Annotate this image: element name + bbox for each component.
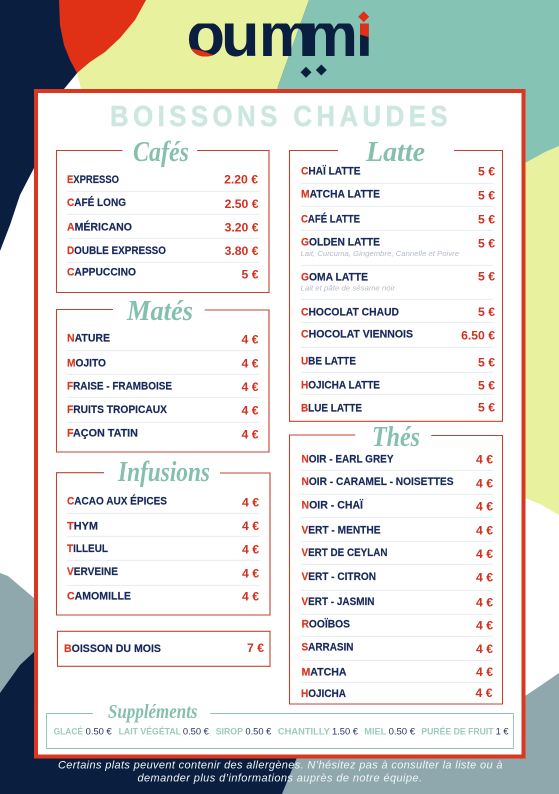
panel: matés: 4 € [242,404,259,418]
panel: thés: 4 € [476,453,493,467]
panel: latte: GOMA LATTE [301,271,368,283]
panel: infusions: THYM [67,520,98,532]
panel: latte: HOJICHA LATTE [301,380,380,392]
panel: thés: 4 € [476,523,493,537]
panel: thés: 4 € [476,499,493,513]
panel: cafés: DOUBLE EXPRESSO [67,245,166,257]
panel: thés: ROOÏBOS [302,618,350,631]
logo: oummi [186,0,373,70]
panel: thés: 4 € [476,642,493,656]
panel: cafés: 3.20 € [225,220,259,234]
panel: matés: 4 € [242,380,259,394]
panel: thés: VERT - CITRON [302,571,376,583]
main menu panel [36,91,524,756]
panel: latte: 5 € [478,378,495,392]
panel: thés: 4 € [476,547,493,561]
panel: latte: UBE LATTE [301,356,356,368]
panel: cafés: CAFÉ LONG [67,196,126,209]
panel: matés: FRUITS TROPICAUX [67,404,167,416]
panel: latte: BLUE LATTE [301,402,362,414]
panel: thés: 4 € [476,476,493,490]
panel: latte: 5 € [478,164,495,178]
panel: thés: 4 € [476,595,493,609]
panel: cafés: 2.50 € [225,197,259,211]
panel: latte: 5 € [478,400,495,414]
panel: suppléments: CHANTILLY [278,727,330,737]
panel: suppléments: GLACÉ [54,727,83,737]
panel: infusions: 4 € [242,543,259,557]
panel: suppléments: PURÉE DE FRUIT [421,727,494,737]
panel: suppléments: SIROP [216,727,243,737]
title: BOISSONS CHAUDES [110,101,452,133]
panel: thés: VERT - MENTHE [302,524,381,536]
panel: infusions: Infusions [117,457,210,488]
panel: thés: 4 € [476,619,493,633]
panel: suppléments: 1.50 € [332,727,358,737]
panel: suppléments: 0.50 € [183,727,209,737]
panel: latte: 5 € [478,269,495,283]
panel: infusions: CACAO AUX ÉPICES [67,495,167,508]
panel: latte: CAFÉ LATTE [301,212,360,225]
panel: matés: FAÇON TATIN [67,427,138,439]
panel: thés: VERT DE CEYLAN [302,547,388,559]
panel: infusions: 4 € [242,519,259,533]
panel: suppléments: MIEL [364,727,387,737]
panel: suppléments: 1 € [496,727,509,737]
panel: latte: 5 € [478,305,495,319]
panel: latte: Lait, Curcuma, Gingembre, Cannelle et Poivre [300,249,459,258]
panel: thés [290,422,502,704]
panel: suppléments: 0.50 € [86,727,112,737]
panel: thés: Thés [372,422,420,453]
panel: cafés: 3.80 € [225,244,259,258]
panel: latte: CHOCOLAT VIENNOIS [301,328,413,340]
panel: matés: Matés [126,296,193,327]
panel: infusions: 4 € [242,496,259,510]
panel: latte: CHAÏ LATTE [301,165,361,178]
panel: thés: 4 € [476,665,493,679]
panel: latte: 5 € [478,212,495,226]
panel: boisson du mois: BOISSON DU MOIS [64,643,161,655]
panel: cafés: EXPRESSO [67,174,119,186]
panel: thés: NOIR - EARL GREY [302,453,394,465]
panel: latte: 5 € [478,236,495,250]
panel: matés: MOJITO [67,357,106,369]
panel: suppléments: Suppléments [108,701,198,723]
panel: cafés [56,137,269,292]
panel: suppléments: 0.50 € [389,727,415,737]
panel: matés: 4 € [242,333,259,347]
panel: thés: VERT - JASMIN [302,596,374,608]
panel: thés: HOJICHA [301,688,346,700]
panel: infusions: TILLEUL [67,543,108,555]
panel: latte: 5 € [478,188,495,202]
panel: latte: MATCHA LATTE [301,189,380,201]
panel: infusions: VERVEINE [67,566,118,578]
allergen note [58,759,502,784]
panel: cafés: 5 € [242,268,259,282]
panel: suppléments: LAIT VÉGÉTAL [119,727,181,737]
panel: boisson du mois [58,631,270,666]
panel: infusions: 4 € [242,590,259,604]
panel: infusions [56,457,270,615]
panel: cafés: CAPPUCCINO [67,267,136,279]
panel: matés: 4 € [242,427,259,441]
panel: matés: NATURE [67,333,110,345]
panel: matés: FRAISE - FRAMBOISE [67,380,172,392]
panel: thés: SARRASIN [302,642,354,654]
panel: matés [56,296,269,452]
panel: latte: Latte [365,137,425,168]
panel: boisson du mois: 7 € [247,641,264,655]
panel: suppléments [46,701,514,748]
panel: infusions: CAMOMILLE [67,590,131,602]
panel: latte: 6.50 € [461,329,495,343]
panel: suppléments: 0.50 € [245,727,271,737]
panel: latte: 5 € [478,355,495,369]
panel: thés: NOIR - CHAÏ [302,498,364,511]
panel: infusions: 4 € [242,566,259,580]
panel: cafés: AMÉRICANO [67,220,132,234]
panel: cafés: Cafés [133,137,189,168]
panel: latte: CHOCOLAT CHAUD [301,306,399,318]
panel: latte: Lait et pâte de sésame noir [300,284,396,293]
panel: matés: 4 € [242,356,259,370]
allergen note: demander plus d’informations auprès de notre équipe. [138,772,422,784]
allergen note: Certains plats peuvent contenir des allergènes. N’hésitez pas à consulter la liste ou à [58,759,502,771]
panel: thés: 4 € [476,686,493,700]
panel: cafés: 2.20 € [224,172,258,186]
panel: thés: 4 € [476,571,493,585]
panel: thés: MATCHA [302,666,346,678]
logo: oummi [186,0,373,70]
panel: latte [290,137,502,421]
panel: latte: GOLDEN LATTE [301,237,380,249]
panel: thés: NOIR - CARAMEL - NOISETTES [302,476,454,488]
